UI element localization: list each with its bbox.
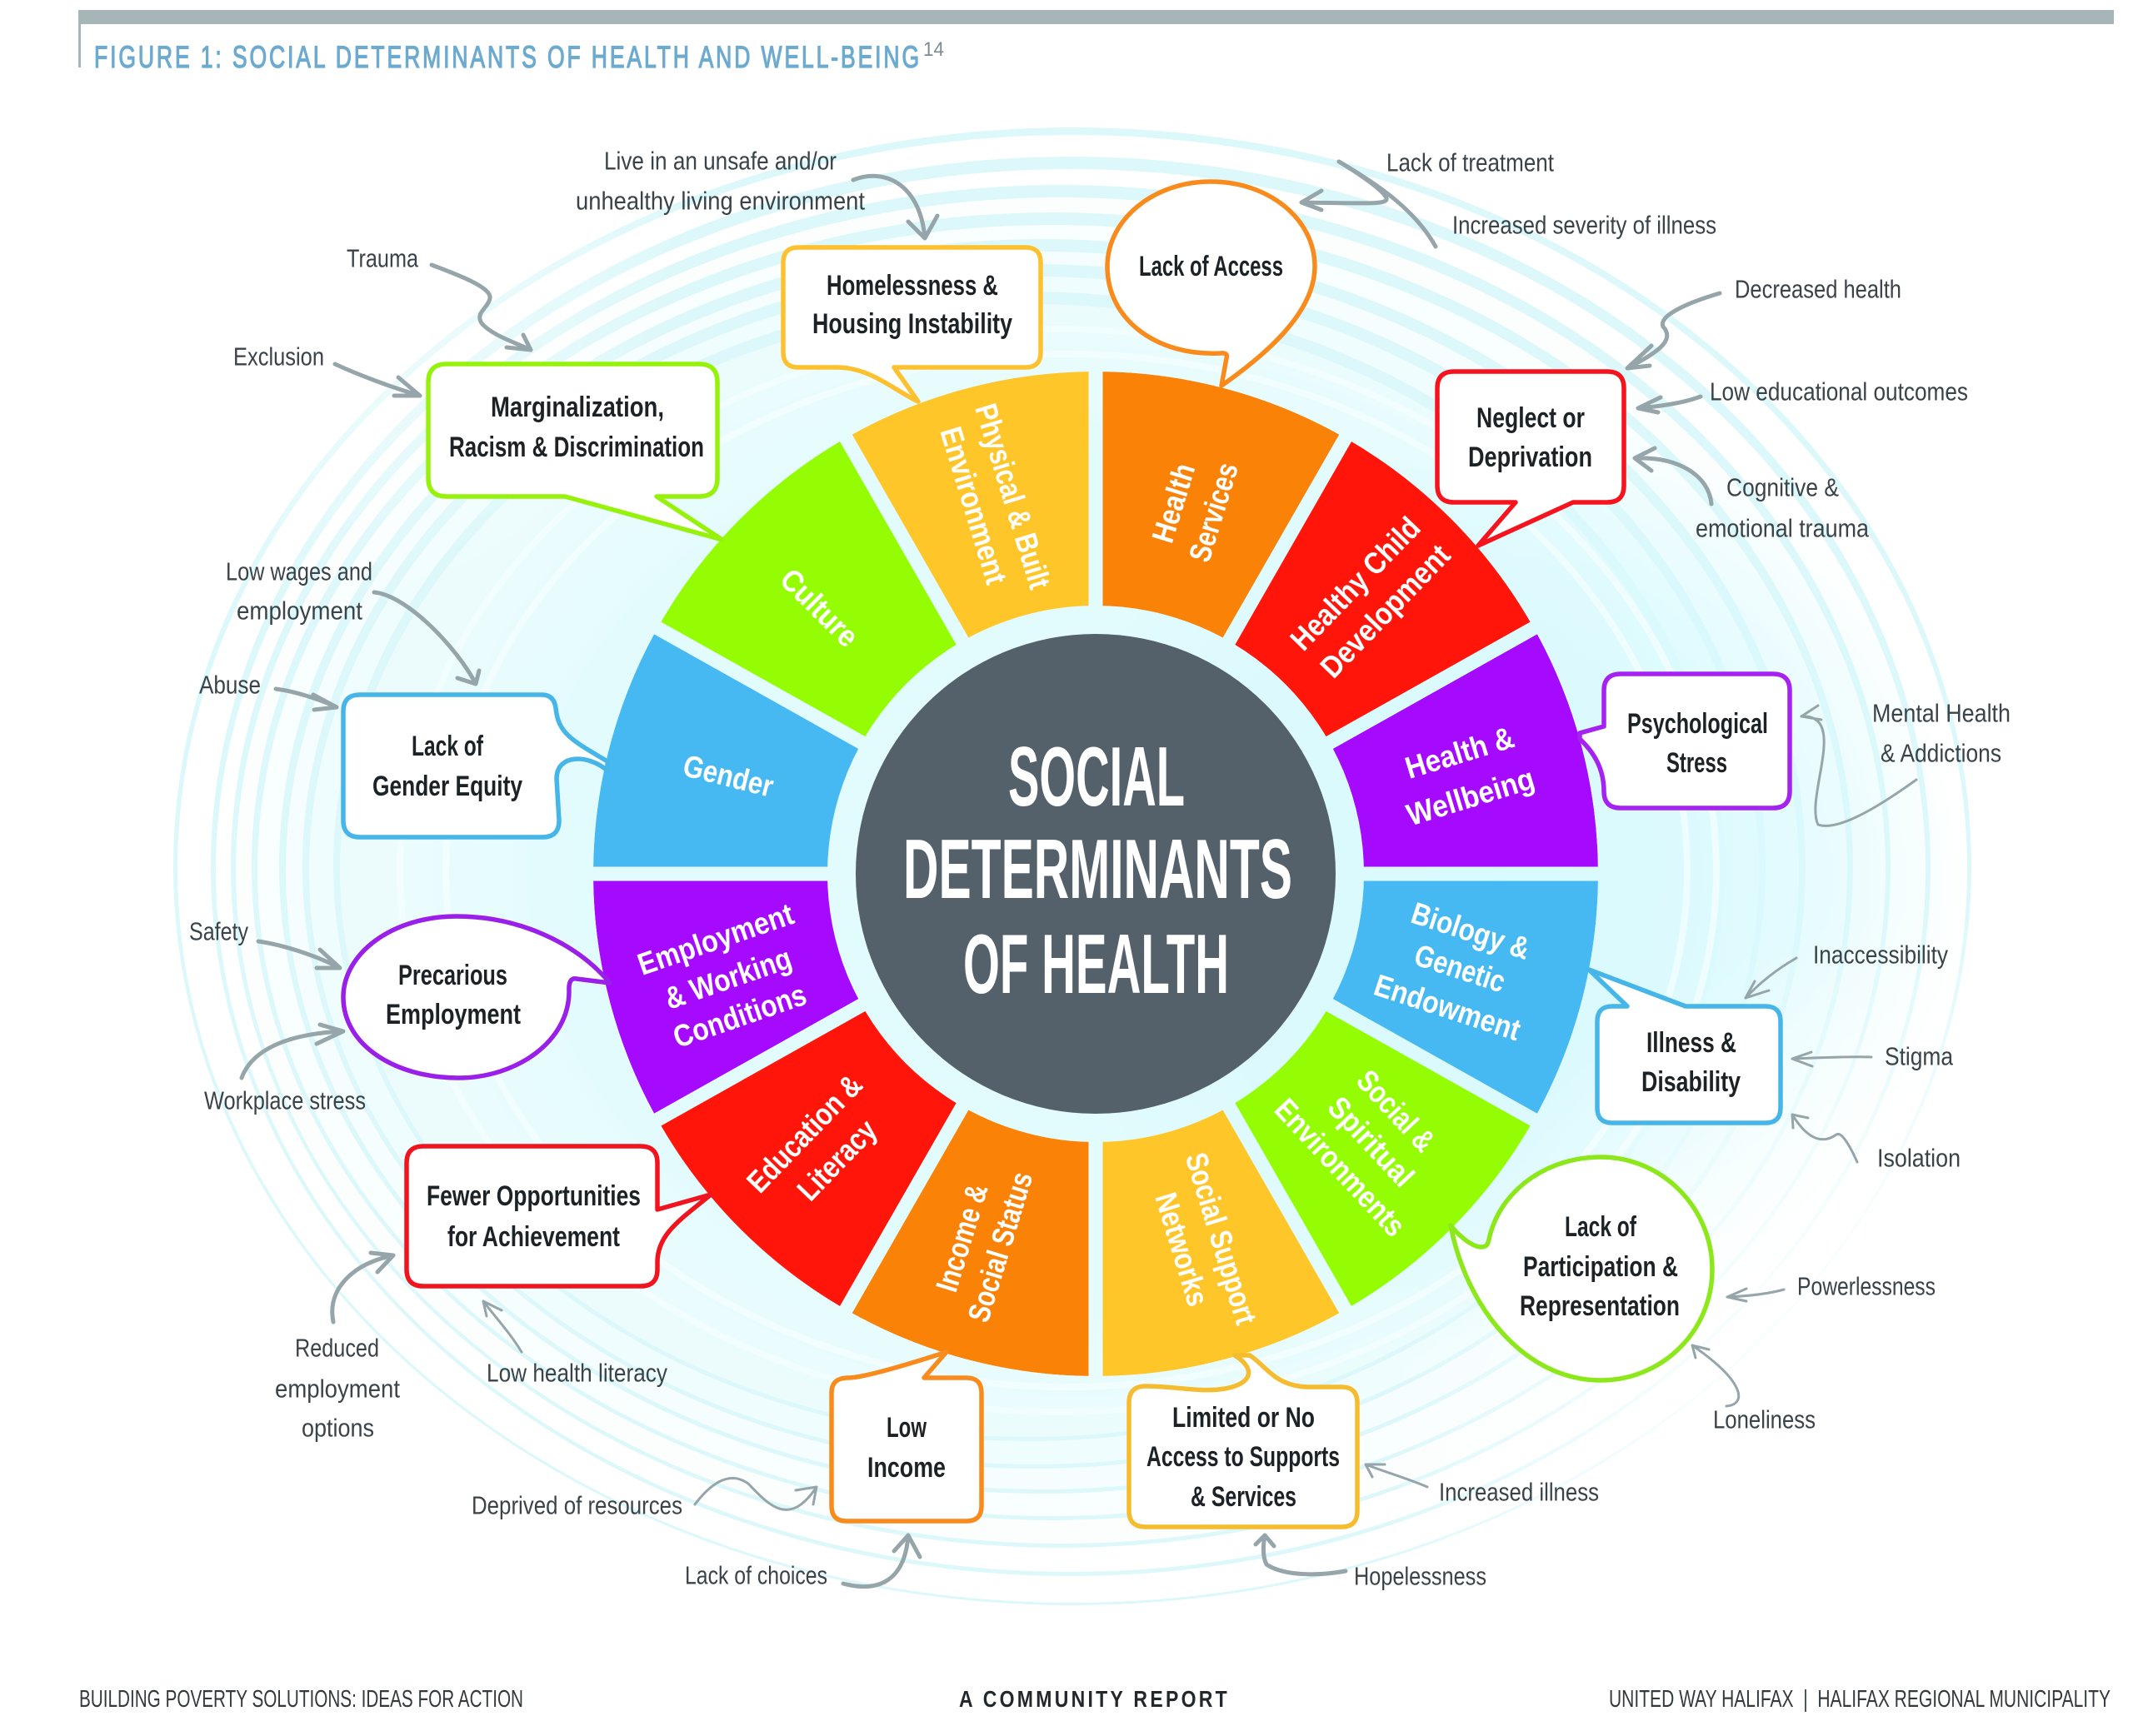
note with arrow: Hopelessness: Hopelessness [1354,1561,1486,1591]
center circle: Social Determinants of Health: OF HEALTH [963,918,1229,1011]
note with arrow: Low wages and employment: Low wages and [226,556,372,586]
note with arrow: Low educational outcomes [1638,377,1968,412]
callout: Homelessness & Housing Instability: Housing Instability [812,308,1012,340]
note with arrow: Reduced employment options: Reduced [295,1333,379,1363]
note with arrow: Decreased health: Decreased health [1735,275,1901,303]
callout: Precarious Employment: Precarious [398,960,507,991]
segment labels: Physical & Built [968,400,1057,593]
segment: Health & Wellbeing [1333,634,1598,866]
segment labels: Spiritual [1321,1090,1421,1194]
center circle: Social Determinants of Health: DETERMINANTS [903,823,1292,916]
segment labels: Literacy [791,1113,884,1207]
segment: Biology & Genetic Endowment [1333,881,1598,1114]
note with arrow: Cognitive & emotional trauma: Cognitive & [1726,473,1839,501]
segment labels: Environments [1268,1092,1412,1243]
callout: Psychological Stress: Psychological [1627,708,1768,740]
callout: Psychological Stress: Stress [1666,747,1727,779]
callout: Marginalization, Racism & Discrimination: Marginalization, [491,392,664,423]
callout: Marginalization, Racism & Discrimination [428,364,722,540]
title: FIGURE 1: SOCIAL DETERMINANTS OF HEALTH AND WELL-BEING [94,40,922,74]
segment labels: Social & [1350,1064,1442,1159]
callout: Illness & Disability [1589,970,1781,1123]
callout: Low Income: Income [867,1452,946,1484]
callout: Neglect or Deprivation [1437,372,1624,546]
note with arrow: Deprived of resources: Deprived of resources [472,1491,682,1519]
segment labels: Networks [1148,1189,1216,1310]
segment labels: Wellbeing [1402,761,1538,832]
callout: Lack of Access [1107,182,1315,386]
note with arrow: Low wages and employment [226,556,479,684]
callout: Low Income [832,1352,982,1521]
callout: Homelessness & Housing Instability [783,247,1041,402]
segment: Income & Social Status [852,1110,1088,1376]
callout: Psychological Stress [1580,674,1790,808]
callout: Neglect or Deprivation: Neglect or [1476,402,1585,434]
note with arrow: Workplace stress [204,1025,366,1115]
segment labels: Health & [1401,720,1518,786]
callout: Precarious Employment [343,916,610,1078]
note with arrow: Lack of treatment [1301,148,1554,210]
segment labels: Gender [680,748,777,804]
callout: Lack of Gender Equity [343,695,607,837]
center circle: Social Determinants of Health: SOCIAL [1008,731,1185,824]
callout: Lack of Participation & Representation: Participation & [1523,1251,1678,1283]
segment labels: Services [1182,459,1245,566]
segment labels [633,400,1538,1329]
callout: Lack of Participation & Representation [1451,1157,1712,1380]
note with arrow: Powerlessness: Powerlessness [1797,1271,1936,1301]
callout: Neglect or Deprivation: Deprivation [1468,441,1592,473]
callout: Limited or No Access to Supports & Services: Access to Supports [1146,1441,1340,1473]
note with arrow: Powerlessness [1727,1271,1936,1301]
note with arrow: Stigma: Stigma [1885,1041,1954,1071]
note with arrow: Reduced employment options: employment [275,1374,400,1403]
note with arrow: Trauma [347,243,531,350]
center circle: Social Determinants of Health [856,634,1336,1114]
note with arrow: Safety: Safety [189,916,248,946]
segment labels: Social Support [1179,1149,1263,1329]
callout: Fewer Opportunities for Achievement [407,1146,711,1286]
callout: Lack of Gender Equity: Lack of [412,731,483,762]
segment: Health Services [1103,372,1340,638]
note with arrow: Low health literacy [483,1301,667,1388]
segment labels: Biology & [1407,895,1534,966]
note with arrow: Abuse [199,670,337,710]
note with arrow: Mental Health & Addictions [1801,698,2011,826]
note with arrow: Increased severity of illness: Increased severity of illness [1452,210,1716,240]
note with arrow: Mental Health & Addictions: Mental Health [1872,698,2011,728]
callout: Lack of Gender Equity: Gender Equity [372,771,522,802]
header bar [78,10,2114,67]
callout: Homelessness & Housing Instability: Homelessness & [827,270,998,302]
callout: Fewer Opportunities for Achievement: for Achievement [447,1221,620,1253]
note with arrow: Lack of choices [685,1535,920,1589]
segment: Physical & Built Environment [852,372,1088,638]
note with arrow: Lack of treatment: Lack of treatment [1386,148,1554,177]
note with arrow: Loneliness: Loneliness [1713,1404,1816,1434]
segment labels: Conditions [669,977,811,1055]
segment labels: Health [1146,459,1201,546]
callout: Limited or No Access to Supports & Services [1129,1355,1357,1527]
callout: Illness & Disability: Disability [1641,1066,1741,1098]
callout: Limited or No Access to Supports & Services: Limited or No [1172,1402,1315,1434]
note with arrow: unsafe living environment: Live in an unsafe and/or [604,147,837,175]
segment: Culture [662,441,957,736]
note with arrow: unsafe living environment [576,147,937,238]
segment labels: Environment [933,423,1014,588]
note with arrow: Reduced employment options: options [302,1413,374,1443]
footer center: A COMMUNITY REPORT [959,1686,1230,1712]
segment: Gender [593,634,858,866]
note with arrow: Lack of choices: Lack of choices [685,1561,827,1589]
note with arrow: Hopelessness [1256,1535,1486,1591]
note with arrow: Low wages and employment: employment [237,596,362,625]
segment: Healthy Child Development [1235,441,1530,736]
segment labels: Healthy Child [1284,511,1427,657]
note with arrow: Isolation [1792,1115,1961,1173]
note with arrow: Loneliness [1692,1345,1816,1434]
callout: Marginalization, Racism & Discrimination: Racism & Discrimination [449,432,704,463]
note with arrow: Exclusion: Exclusion [233,342,324,372]
segment: Education & Literacy [662,1011,957,1306]
callout: Precarious Employment: Employment [386,999,521,1030]
title: 14 [923,38,944,61]
callout: Lack of Access: Lack of Access [1139,251,1283,282]
note with arrow: Inaccessibility [1746,940,1948,998]
segment labels: Income & [929,1180,995,1295]
note with arrow: Cognitive & emotional trauma [1635,448,1870,543]
segment labels: Endowment [1370,968,1525,1047]
segment labels: Culture [773,561,866,654]
note with arrow: unsafe living environment: unhealthy living environment [576,187,865,215]
note with arrow: Isolation: Isolation [1877,1143,1961,1173]
callout: Lack of Participation & Representation: Lack of [1565,1211,1636,1243]
segment labels: Genetic [1411,938,1510,999]
note with arrow: Exclusion [233,342,420,396]
note with arrow: Increased severity of illness [1339,162,1716,247]
note with arrow: Workplace stress: Workplace stress [204,1086,366,1115]
segment labels: Education & [740,1068,869,1200]
note with arrow: Increased illness: Increased illness [1439,1478,1599,1506]
note with arrow: Low health literacy: Low health literacy [487,1358,667,1388]
segment labels: Employment [633,896,798,982]
callout: Lack of Participation & Representation: Representation [1520,1290,1680,1322]
callout: Limited or No Access to Supports & Services: & Services [1191,1481,1296,1513]
note with arrow: Increased illness [1366,1464,1599,1506]
segment labels: & Working [660,940,796,1016]
segment labels: Development [1314,538,1457,685]
callout: Fewer Opportunities for Achievement: Fewer Opportunities [427,1180,641,1212]
note with arrow: Abuse: Abuse [199,670,261,700]
note with arrow: Reduced employment options [275,1253,400,1443]
note with arrow: Stigma [1792,1041,1954,1071]
note with arrow: Inaccessibility: Inaccessibility [1813,940,1948,970]
wheel of twelve determinants [593,372,1598,1376]
note with arrow: Safety [189,916,340,968]
note with arrow: Mental Health & Addictions: & Addictions [1881,738,2001,768]
note with arrow: Decreased health [1627,275,1901,368]
segment labels: Social Status [962,1168,1039,1326]
segment: Employment & Working Conditions [593,881,858,1114]
callout: Illness & Disability: Illness & [1646,1027,1736,1059]
note with arrow: Deprived of resources [472,1478,817,1519]
note with arrow: Cognitive & emotional trauma: emotional trauma [1696,513,1870,543]
note with arrow: Trauma: Trauma [347,243,419,273]
segment: Social Support Networks [1103,1110,1340,1376]
callout: Low Income: Low [887,1412,927,1444]
footer left: BUILDING POVERTY SOLUTIONS: IDEAS FOR ACTION [79,1686,523,1713]
segment: Social & Spiritual Environments [1235,1011,1530,1306]
note with arrow: Low educational outcomes: Low educational outcomes [1710,377,1968,407]
